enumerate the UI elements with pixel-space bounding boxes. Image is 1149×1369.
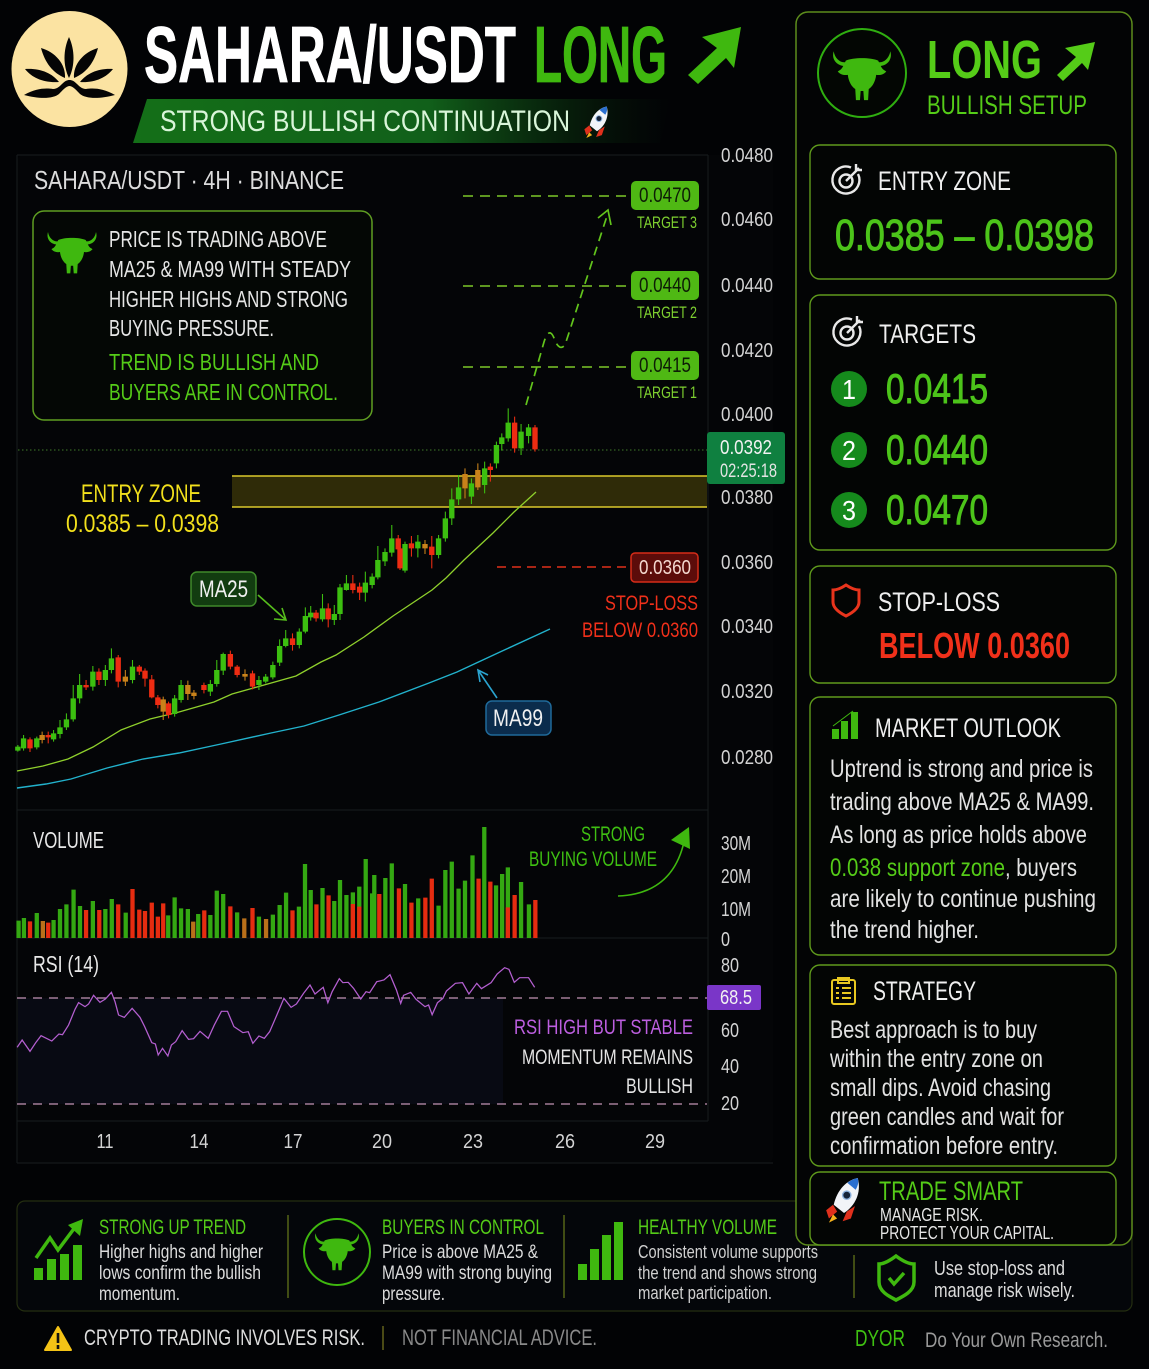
volume axis: 0 [721, 929, 730, 951]
current price tag [707, 432, 785, 484]
text: strategy body [829, 1016, 1064, 1160]
callout text: TREND IS BULLISH AND [109, 349, 319, 375]
MA99 label [486, 701, 551, 735]
text: stop-loss: STOP-LOSS [878, 587, 1000, 617]
RSI guide lines [17, 998, 707, 1104]
footer disclaimer [45, 1325, 1108, 1352]
text: buyers in control: MA99 with strong buying [382, 1263, 552, 1284]
panel: right column [796, 12, 1132, 1245]
text: strategy body: small dips. Avoid chasing [830, 1074, 1051, 1102]
text: outlook body: , buyers [1005, 854, 1077, 882]
text: strong up trend: STRONG UP TREND [99, 1216, 246, 1239]
panel: strategy [810, 965, 1116, 1166]
target 2 label: 0.0440 [639, 274, 691, 297]
icon: check shield [879, 1256, 914, 1300]
target 3 label: 0.0470 [639, 184, 691, 207]
entry zone label: ENTRY ZONE [81, 480, 201, 508]
text: outlook body [830, 755, 1096, 944]
icon: shield [833, 585, 859, 616]
icon: up trend [34, 1219, 83, 1280]
logo [12, 11, 128, 127]
current price line [18, 449, 707, 451]
time axis: 20 [372, 1131, 392, 1153]
title: LONG [534, 10, 667, 99]
panel: trade smart [810, 1172, 1116, 1245]
price axis [721, 145, 773, 769]
text: healthy volume [638, 1216, 818, 1303]
text: strong up trend: lows confirm the bullish [99, 1263, 261, 1284]
target 1: 1 [842, 374, 856, 405]
text: risk warning: CRYPTO TRADING INVOLVES RISK. [84, 1325, 365, 1350]
target 1: 0.0415 [886, 365, 988, 412]
target 2: 2 [842, 435, 856, 466]
text: outlook heading: MARKET OUTLOOK [875, 713, 1061, 743]
text: targets heading: TARGETS [879, 319, 976, 349]
time axis: 26 [555, 1131, 575, 1153]
text: strong up trend [99, 1216, 264, 1305]
stop-loss label: STOP-LOSS [605, 592, 698, 615]
price axis: 0.0280 [721, 747, 773, 769]
target 1 label [631, 351, 699, 402]
price axis: 0.0460 [721, 209, 773, 231]
title: SAHARA/USDT [144, 10, 516, 99]
RSI heading: RSI (14) [33, 951, 99, 977]
text: outlook body: As long as price holds above [830, 821, 1087, 849]
RSI axis: 20 [721, 1093, 739, 1115]
text: risk note [934, 1258, 1075, 1302]
RSI note: RSI HIGH BUT STABLE [514, 1016, 693, 1039]
buying volume note: STRONG [581, 823, 645, 846]
text: DYOR: DYOR [855, 1325, 905, 1351]
callout text [109, 226, 351, 405]
text: buyers in control [382, 1216, 552, 1305]
icon: warning [45, 1327, 71, 1350]
text: risk note: Use stop-loss and [934, 1258, 1065, 1280]
panel: market outlook [810, 697, 1116, 955]
icon: bars [832, 711, 858, 739]
icon: target [833, 316, 863, 346]
MA25 line [17, 492, 536, 771]
time axis [96, 1131, 665, 1153]
text: outlook body: Uptrend is strong and price is [830, 755, 1093, 783]
price axis: 0.0400 [721, 404, 773, 426]
text: strategy body: green candles and wait for [830, 1103, 1064, 1131]
text: strong up trend: Higher highs and higher [99, 1242, 264, 1263]
volume heading: VOLUME [33, 827, 104, 853]
arrow: projected path [526, 210, 611, 405]
target 2 label: TARGET 2 [637, 303, 697, 322]
text: trade smart: TRADE SMART [879, 1176, 1023, 1206]
icon: target [832, 164, 862, 194]
text: healthy volume: market participation. [638, 1283, 772, 1303]
text: healthy volume: Consistent volume supports [638, 1242, 818, 1262]
target 2: 0.0440 [886, 426, 988, 473]
RSI note [514, 1016, 693, 1098]
entry zone label [66, 480, 219, 538]
subtitle ribbon: STRONG BULLISH CONTINUATION [160, 105, 570, 138]
volume bars [19, 827, 535, 938]
icon: bull badge [304, 1219, 370, 1285]
text: strategy body: confirmation before entry. [830, 1132, 1058, 1160]
time axis: 23 [463, 1131, 483, 1153]
subtitle ribbon [133, 99, 670, 143]
icon: bull badge [818, 29, 906, 117]
arrow: buying volume [618, 827, 690, 896]
RSI axis [721, 955, 739, 1115]
target 2 label [631, 271, 699, 322]
target 3 label: TARGET 3 [637, 213, 697, 232]
price axis: 0.0440 [721, 275, 773, 297]
text: strategy body: within the entry zone on [829, 1045, 1043, 1073]
volume axis: 20M [721, 866, 751, 888]
icon: rocket [826, 1178, 859, 1223]
volume axis: 30M [721, 833, 751, 855]
text: trade smart [879, 1176, 1054, 1243]
RSI axis: 60 [721, 1020, 739, 1042]
time axis: 17 [284, 1131, 302, 1153]
RSI note: BULLISH [626, 1075, 693, 1098]
RSI note: MOMENTUM REMAINS [522, 1046, 693, 1069]
RSI value tag [707, 985, 761, 1010]
time axis: 29 [645, 1131, 665, 1153]
stop-loss label: 0.0360 [639, 557, 691, 579]
text: strategy heading: STRATEGY [873, 976, 976, 1006]
callout text: PRICE IS TRADING ABOVE [109, 226, 327, 252]
text: stop value: BELOW 0.0360 [879, 625, 1070, 666]
volume axis [721, 833, 751, 951]
icon: bull [47, 232, 97, 273]
price axis: 0.0420 [721, 340, 773, 362]
target 3: 0.0470 [886, 486, 988, 533]
heading: long: LONG [927, 30, 1042, 90]
RSI axis: 40 [721, 1056, 739, 1078]
text: buyers in control: pressure. [382, 1284, 445, 1305]
entry zone band [232, 476, 707, 507]
text: outlook body: are likely to continue pushing [830, 885, 1096, 913]
callout text: MA25 & MA99 WITH STEADY [109, 256, 351, 282]
callout text: BUYERS ARE IN CONTROL. [109, 379, 338, 405]
volume axis: 10M [721, 899, 751, 921]
RSI axis: 80 [721, 955, 739, 977]
panel: bottom summary [17, 1201, 1132, 1311]
text: advice: NOT FINANCIAL ADVICE. [402, 1325, 597, 1350]
current price tag: 0.0392 [720, 437, 772, 459]
panel: targets [810, 295, 1116, 550]
price axis: 0.0340 [721, 616, 773, 638]
entry zone label: 0.0385 – 0.0398 [66, 510, 219, 538]
text: entry range: 0.0385 – 0.0398 [835, 211, 1094, 260]
heading: long [927, 30, 1087, 120]
price axis: 0.0320 [721, 681, 773, 703]
target lines [463, 196, 628, 367]
target 1 label: TARGET 1 [637, 383, 697, 402]
panel: entry zone [810, 145, 1116, 279]
current price tag: 02:25:18 [720, 461, 777, 482]
text: healthy volume: HEALTHY VOLUME [638, 1216, 777, 1239]
arrow: MA99 [478, 670, 497, 698]
target 3: 3 [842, 495, 856, 526]
text: research: Do Your Own Research. [925, 1329, 1108, 1352]
callout text: BUYING PRESSURE. [109, 315, 274, 341]
text: buyers in control: BUYERS IN CONTROL [382, 1216, 544, 1239]
text: outlook body: 0.038 support zone [830, 854, 1005, 882]
price axis: 0.0480 [721, 145, 773, 167]
target 2 [831, 426, 988, 473]
icon: rocket [584, 106, 608, 138]
MA99 label: MA99 [493, 705, 543, 732]
divider [382, 1326, 384, 1350]
text: trade smart: MANAGE RISK. [880, 1205, 983, 1225]
heading: long: BULLISH SETUP [927, 90, 1087, 120]
callout text: HIGHER HIGHS AND STRONG [109, 286, 348, 312]
text: trade smart: PROTECT YOUR CAPITAL. [880, 1223, 1054, 1243]
buying volume note: BUYING VOLUME [529, 848, 657, 871]
chart heading: SAHARA/USDT · 4H · BINANCE [34, 165, 344, 195]
panel: stop-loss [810, 566, 1116, 683]
text: buyers in control: Price is above MA25 & [382, 1242, 538, 1263]
text: healthy volume: the trend and shows strong [638, 1263, 817, 1283]
text: outlook body: the trend higher. [830, 916, 979, 944]
text: entry zone: ENTRY ZONE [878, 166, 1011, 196]
price axis: 0.0380 [721, 487, 773, 509]
time axis: 14 [190, 1131, 208, 1153]
text: strong up trend: momentum. [99, 1284, 180, 1305]
text: strategy body: Best approach is to buy [830, 1016, 1037, 1044]
arrow: MA25 [258, 595, 286, 620]
arrow: long [1057, 42, 1095, 81]
RSI band [18, 998, 503, 1104]
target 3 label [631, 181, 699, 232]
price axis: 0.0360 [721, 552, 773, 574]
icon: volume bars [578, 1222, 623, 1280]
MA25 label [191, 572, 256, 606]
target 1 label: 0.0415 [639, 354, 691, 377]
stop-loss line [497, 566, 630, 568]
target 1 [831, 365, 988, 412]
MA25 label: MA25 [199, 576, 248, 603]
buying volume note [529, 823, 657, 871]
arrow: title up-right [688, 27, 741, 84]
stop-loss label [582, 553, 698, 642]
text: outlook body: trading above MA25 & MA99. [830, 788, 1094, 816]
callout: price summary [33, 211, 372, 420]
icon: clipboard [832, 978, 855, 1004]
RSI line [17, 968, 535, 1056]
RSI value tag: 68.5 [720, 987, 752, 1009]
target 3 [831, 486, 988, 533]
time axis: 11 [96, 1131, 114, 1153]
MA99 line [17, 629, 550, 788]
stop-loss label: BELOW 0.0360 [582, 619, 698, 642]
candlesticks [18, 408, 535, 752]
text: risk note: manage risk wisely. [934, 1280, 1075, 1302]
